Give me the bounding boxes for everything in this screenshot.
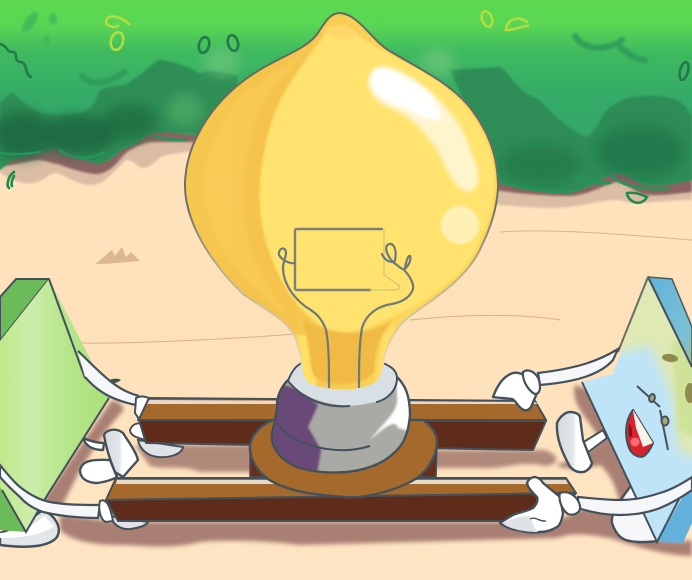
neck edges [296, 326, 394, 386]
blue body face [582, 280, 692, 540]
front wooden bar [106, 478, 576, 521]
hedge shadow on the ground [0, 100, 692, 208]
dark leaves [0, 34, 690, 203]
green body side top [0, 279, 49, 341]
green body face [0, 279, 110, 532]
green hand under back bar [130, 423, 183, 457]
bulb [180, 10, 502, 395]
purple side [273, 380, 409, 470]
hedge strokes [82, 36, 645, 83]
hedge [0, 0, 692, 192]
left mid tone [271, 85, 272, 86]
blue body side bottom [657, 480, 692, 543]
shadow: front bar [60, 500, 692, 556]
hedge darker mass right [450, 67, 692, 192]
bulb glass [180, 10, 502, 395]
ground shadows [40, 385, 692, 556]
blue top hand [493, 370, 540, 410]
white highlight [370, 380, 409, 439]
leaf outlines [0, 10, 690, 203]
nipple tone [322, 25, 358, 38]
blue bottom arm [578, 477, 692, 515]
green top arm [78, 351, 149, 419]
blue character [493, 270, 692, 550]
green bottom arm [0, 465, 113, 522]
green hand under front bar [110, 516, 148, 529]
shadow: blue body [556, 385, 650, 515]
socket [268, 363, 415, 474]
blue mouth [626, 410, 653, 457]
base plate [250, 420, 437, 497]
silver collar [288, 363, 397, 405]
shadow: back bar left [135, 445, 255, 472]
blue body spots [662, 353, 692, 403]
ground cracks and grass tuft [76, 231, 692, 343]
shadow: back bar right [430, 450, 556, 468]
small highlight [441, 206, 479, 244]
filament [279, 229, 413, 387]
yellow leaves [106, 10, 528, 51]
green leaf tip [108, 379, 121, 383]
blue leg and foot [557, 412, 607, 472]
hedge shade blobs [0, 104, 685, 185]
back wooden bar [138, 398, 546, 450]
blue bottom hand [500, 477, 580, 532]
green hedge edge strokes [0, 136, 668, 193]
centre yellow [260, 25, 494, 332]
green body side bottom [0, 487, 26, 532]
blue face brow and eyes [637, 386, 668, 450]
blue top arm [538, 349, 618, 385]
shadow: green body [40, 400, 123, 510]
blue body side top [648, 277, 692, 367]
neck orange [303, 320, 392, 384]
hedge pale patches near the bulb [167, 48, 456, 126]
highlight [368, 67, 478, 192]
socket ring line [277, 423, 370, 450]
green character [0, 279, 149, 547]
hedge darker mass left [0, 60, 238, 170]
hedge blob spots [19, 9, 57, 47]
green feet [0, 430, 138, 547]
blue lower foot [612, 487, 658, 542]
